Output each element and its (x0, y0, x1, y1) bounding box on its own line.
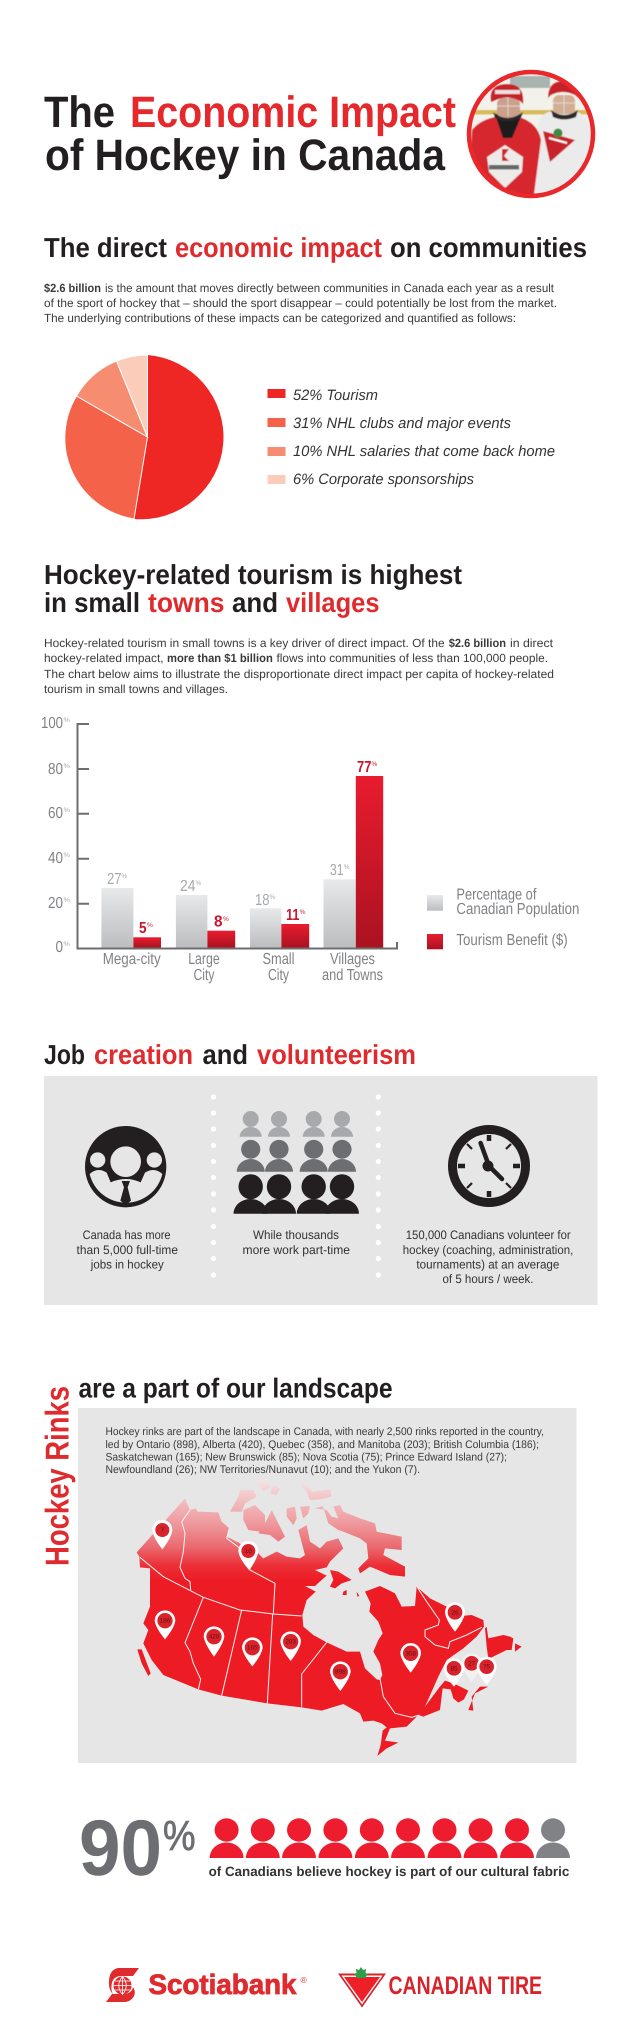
intro paragraph: of the sport of hockey that – should the sport disappear – could potentially be lost from the market. (44, 296, 557, 310)
logo: Scotiabank: Scotiabank (148, 1969, 297, 2000)
bars: villages and towns: % (344, 864, 350, 871)
heading: jobs: volunteerism (257, 1039, 416, 1070)
text: full-time jobs: than 5,000 full-time (76, 1243, 178, 1257)
logo: Scotiabank (106, 1968, 308, 2002)
map description: Newfoundland (26); NW Territories/Nunavut (10); and the Yukon (7). (106, 1464, 420, 1476)
bar chart (41, 715, 397, 984)
map description: Saskatchewan (165); New Brunswick (85); Nova Scotia (75); Prince Edward Island (27); (106, 1452, 507, 1464)
bars: large city: % (196, 880, 202, 887)
pin: Ontario 898 (330, 1661, 351, 1691)
tourism paragraph: flows into communities of less than 100,000 people. (276, 651, 548, 665)
text: part-time work: While thousands (253, 1228, 339, 1242)
logo: Canadian Tire: CANADIAN TIRE (388, 1972, 542, 2000)
heading: tourism: villages (286, 587, 380, 618)
heading: tourism: in small (44, 587, 140, 618)
text: full-time jobs (76, 1228, 178, 1272)
bars: mega-city: % (122, 873, 128, 880)
pie legend: 31% NHL clubs and major events (293, 415, 511, 432)
map of Canada (137, 1480, 522, 1756)
heading: tourism: and (232, 587, 278, 618)
chart axes and y labels: % (64, 807, 70, 814)
heading: part of our landscape: are a part of our landscape (78, 1372, 392, 1403)
pin: British Columbia 186: 186 (160, 1617, 170, 1624)
chart axes and y labels: % (64, 852, 70, 859)
pin: Newfoundland 26: 26 (451, 1609, 459, 1616)
text: part-time work (242, 1228, 350, 1257)
bars: villages and towns: Villages (330, 951, 375, 968)
bars: villages and towns: and Towns (322, 967, 383, 984)
heading: tourism: Hockey-related tourism is highest (44, 559, 462, 590)
bars: mega-city (101, 871, 161, 968)
text: full-time jobs: Canada has more (83, 1228, 171, 1242)
icon: rows of people (234, 1111, 359, 1214)
pin: Nova Scotia 75: 75 (483, 1663, 490, 1670)
bars: mega-city: 27 (107, 871, 122, 888)
bars: small city (250, 892, 309, 984)
chart axes and y labels: 40 (48, 850, 63, 867)
big stat: 90%: % (163, 1812, 196, 1859)
big stat: 90%: 90 (79, 1803, 162, 1892)
panel: job creation (44, 1076, 598, 1305)
bars: small city: % (300, 909, 306, 916)
tourism paragraph: tourism in small towns and villages. (44, 682, 228, 696)
vertical heading: Hockey Rinks: Hockey Rinks (38, 1386, 76, 1566)
pictogram: ten people, nine red (210, 1818, 570, 1858)
title (44, 88, 456, 180)
bars: villages and towns: % (372, 761, 378, 768)
heading: jobs: creation (94, 1039, 193, 1070)
bars: mega-city: 5 (139, 920, 147, 937)
chart axes and y labels: % (64, 763, 70, 770)
bars: small city: 18 (255, 892, 270, 909)
heading: jobs: and (202, 1039, 248, 1070)
bars: large city: % (223, 916, 229, 923)
title: of Hockey in Canada (45, 131, 445, 180)
bar chart legend: Canadian Population (456, 901, 579, 918)
bar chart legend: Tourism Benefit ($) (456, 932, 568, 949)
icon: business people in a circle (85, 1126, 166, 1207)
chart axes and y labels: 80 (48, 761, 63, 778)
tourism paragraph (44, 636, 554, 696)
pin: Quebec 358 (400, 1643, 421, 1673)
pin: Saskatchewan 165 (242, 1637, 263, 1666)
bar chart legend (427, 886, 579, 949)
bars: small city: Small (262, 951, 294, 968)
pin: Prince Edward Island 27: 27 (468, 1660, 475, 1667)
pin: Saskatchewan 165: 165 (247, 1644, 258, 1651)
heading: jobs (44, 1039, 416, 1070)
pin: Ontario 898: 898 (335, 1668, 346, 1675)
intro paragraph (44, 281, 557, 325)
bars: large city: 24 (180, 878, 196, 895)
text: volunteers: 150,000 Canadians volunteer for (406, 1228, 571, 1242)
pie legend: 52% Tourism (293, 387, 378, 404)
title: Economic Impact (130, 88, 456, 137)
bars: small city: 11 (286, 907, 299, 924)
bars: villages and towns (322, 759, 383, 984)
chart axes and y labels: 20 (48, 895, 63, 912)
logo: Canadian Tire (338, 1967, 542, 2008)
heading: jobs: Job (44, 1039, 85, 1070)
tourism paragraph: The chart below aims to illustrate the disproportionate direct impact per capita of hockey-related (44, 667, 554, 681)
logo: Scotiabank: ® (300, 1975, 308, 1985)
pin: Newfoundland 26 (445, 1602, 465, 1632)
pin: Quebec 358: 358 (405, 1650, 416, 1657)
chart axes and y labels: 100 (41, 715, 63, 732)
intro paragraph: $2.6 billion (44, 281, 101, 295)
chart axes and y labels: % (64, 897, 70, 904)
pie legend (268, 387, 555, 488)
heading: tourism (44, 559, 462, 618)
pie legend: 6% Corporate sponsorships (293, 471, 474, 488)
bars: mega-city: Mega-city (103, 951, 161, 968)
text: volunteers (403, 1228, 573, 1286)
chart axes and y labels: % (64, 941, 70, 948)
caption for 90%: of Canadians believe hockey is part of our cultural fabric (209, 1864, 570, 1879)
pin: Alberta 420: 420 (209, 1633, 219, 1640)
bars: villages and towns: 31 (330, 862, 344, 879)
bar chart legend: Percentage of (456, 886, 537, 904)
pin: Prince Edward Island 27 (462, 1653, 482, 1682)
pin: Yukon 7: 7 (161, 1527, 164, 1534)
chart axes and y labels: 0 (56, 939, 63, 956)
intro paragraph: is the amount that moves directly between communities in Canada each year as a result (105, 281, 555, 295)
pin: New Brunswick 85 (444, 1658, 464, 1687)
pin: Alberta 420 (204, 1626, 224, 1657)
pin: British Columbia 186 (155, 1610, 175, 1639)
bars: large city (176, 878, 235, 984)
pin: NWT/Nunavut 10 (238, 1541, 258, 1570)
bars: large city: City (194, 967, 214, 984)
panel: map of hockey rinks (78, 1408, 576, 1763)
text: volunteers: hockey (coaching, administration, (403, 1243, 573, 1257)
pin: New Brunswick 85: 85 (450, 1665, 458, 1672)
bars: small city: City (268, 967, 289, 984)
heading: direct economic impact: economic impact (175, 232, 382, 263)
pie chart (65, 355, 223, 519)
heading: direct economic impact (44, 232, 587, 263)
pin: Manitoba 203 (280, 1631, 301, 1661)
chart axes and y labels: 60 (48, 805, 63, 822)
text: part-time work: more work part-time (242, 1243, 350, 1257)
pin: Yukon 7 (152, 1520, 172, 1549)
tourism paragraph: Hockey-related tourism in small towns is a key driver of direct impact. Of the (44, 636, 445, 650)
heading: direct economic impact: The direct (44, 232, 167, 263)
map description: Hockey rinks are part of the landscape in Canada, with nearly 2,500 rinks reported in the country, (106, 1426, 544, 1438)
chart axes and y labels (41, 715, 397, 956)
text: volunteers: tournaments) at an average (416, 1258, 560, 1272)
pin: Nova Scotia 75 (477, 1657, 497, 1685)
photo: two young hockey players in a red circle (465, 68, 597, 202)
bars: large city: 8 (214, 914, 223, 931)
pin: Manitoba 203: 203 (285, 1638, 296, 1645)
pin: NWT/Nunavut 10: 10 (245, 1548, 252, 1555)
intro paragraph: The underlying contributions of these impacts can be categorized and quantified as follows: (44, 311, 516, 325)
title: The (44, 88, 115, 137)
heading: direct economic impact: on communities (390, 232, 587, 263)
tourism paragraph: more than $1 billion (167, 651, 273, 665)
map description (106, 1426, 544, 1476)
text: volunteers: of 5 hours / week. (442, 1272, 534, 1286)
tourism paragraph: $2.6 billion (449, 636, 506, 650)
provincial borders (140, 1510, 482, 1717)
tourism paragraph: hockey-related impact, (44, 651, 164, 665)
tourism paragraph: in direct (510, 636, 554, 650)
icon: clock (452, 1130, 526, 1202)
map description: led by Ontario (898), Alberta (420), Quebec (358), and Manitoba (203); British Columbia (186); (106, 1439, 539, 1451)
heading: tourism: towns (148, 587, 224, 618)
bars: small city: % (270, 894, 276, 901)
text: full-time jobs: jobs in hockey (90, 1258, 165, 1272)
bars: mega-city: % (147, 922, 153, 929)
pie legend: 10% NHL salaries that come back home (293, 443, 555, 460)
bars: large city: Large (188, 951, 220, 968)
bars: villages and towns: 77 (357, 759, 371, 776)
chart axes and y labels: % (64, 717, 70, 724)
